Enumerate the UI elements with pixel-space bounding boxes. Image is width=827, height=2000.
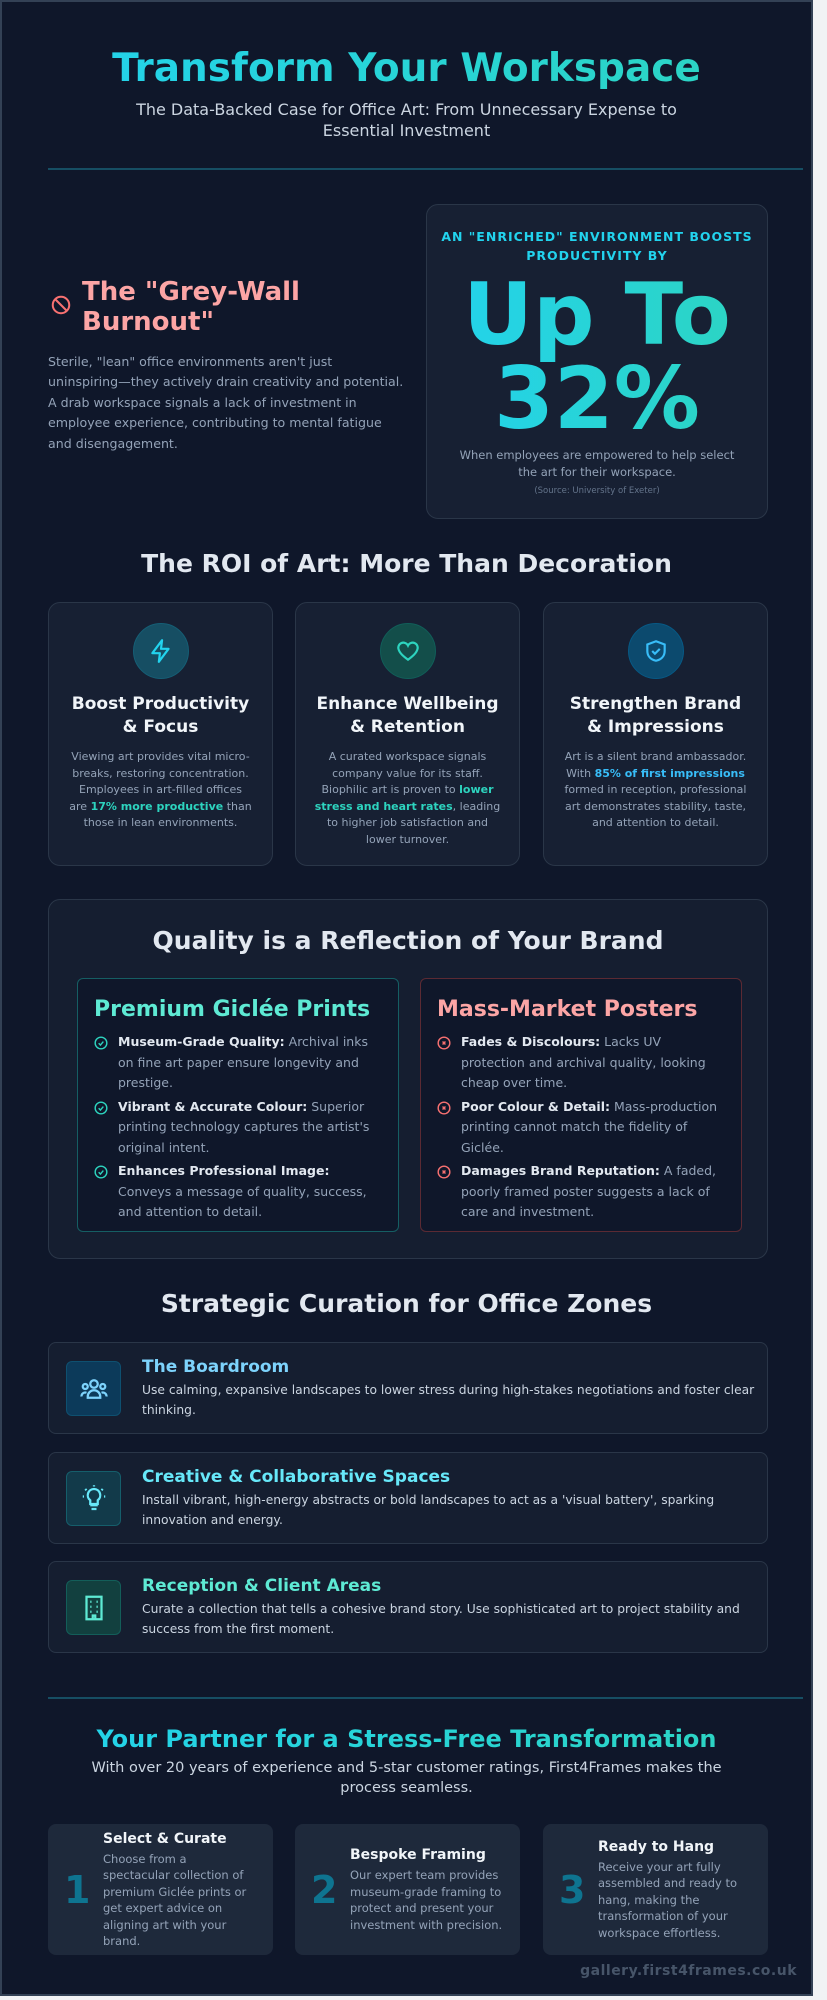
text: employee experience, contributing to mental fatigue <box>48 415 382 430</box>
subtitle: The Data-Backed Case for Office Art: From Unnecessary Expense to Essential Investment <box>136 100 677 140</box>
heading: The "Grey-Wall <box>82 277 300 307</box>
icon: heart <box>380 623 436 679</box>
card: productivity: Viewing art provides vital micro-breaks, restoring concentration. Employees in art-filled offices are 17% more productive than those in lean environments. <box>69 750 252 829</box>
card: brand: Strengthen Brand <box>570 694 741 714</box>
step 3: 3 <box>559 1868 585 1912</box>
card: wellbeing: A curated workspace signals company value for its staff. Biophilic art is proven to lower stress and heart rates, leading to higher job satisfaction and lower turnover. <box>315 750 500 846</box>
heading <box>82 277 300 337</box>
text: uninspiring—they actively drain creativity and potential. <box>48 374 403 389</box>
sub-panel: giclee: Museum-Grade Quality: Archival inks on fine art paper ensure longevity and prestige. <box>118 1034 368 1090</box>
zone: reception <box>48 1561 768 1653</box>
sub-panel: giclee <box>77 978 399 1232</box>
big stat: 32% <box>494 349 700 449</box>
source: (Source: University of Exeter) <box>534 486 660 496</box>
zone: creative: Install vibrant, high-energy abstracts or bold landscapes to act as a 'visual battery', sparking innovation and energy. <box>142 1493 714 1526</box>
panel: quality <box>48 899 768 1259</box>
sub-panel: giclee: Premium Giclée Prints <box>94 997 370 1022</box>
section: grey-wall burnout <box>48 277 403 451</box>
sub-panel: posters: Poor Colour & Detail: Mass-production printing cannot match the fidelity of Giclée. <box>461 1098 717 1154</box>
heading: ROI: The ROI of Art: More Than Decoration <box>141 549 672 578</box>
card: brand <box>543 602 768 866</box>
step 2 <box>295 1824 520 1955</box>
partner subtitle: With over 20 years of experience and 5-star customer ratings, First4Frames makes the process seamless. <box>91 1760 722 1796</box>
step 2: Bespoke Framing <box>350 1847 486 1863</box>
step 2: Our expert team provides museum-grade framing to protect and present your investment with precision. <box>350 1868 502 1932</box>
step 2: 2 <box>311 1868 337 1912</box>
card: brand: & Impressions <box>587 717 724 737</box>
step 1: Select & Curate <box>103 1830 227 1846</box>
heading: partner: Your Partner for a Stress-Free Transformation <box>96 1725 716 1753</box>
step 1: 1 <box>64 1868 90 1912</box>
icon: shield <box>628 623 684 679</box>
step 3: Receive your art fully assembled and ready to hang, making the transformation of your workspace effortless. <box>598 1860 737 1940</box>
text: and disengagement. <box>48 436 178 451</box>
card: productivity: Boost Productivity <box>72 694 249 714</box>
card: brand: Art is a silent brand ambassador. With 85% of first impressions formed in reception, professional art demonstrates stability, taste, and attention to detail. <box>564 750 746 829</box>
card: productivity <box>48 602 273 866</box>
heading: Quality is a Reflection of Your Brand <box>153 926 663 955</box>
sub-panel: posters: Mass-Market Posters <box>437 997 698 1022</box>
icon: bulb <box>66 1471 121 1526</box>
card: wellbeing <box>295 602 520 866</box>
stat label: AN "ENRICHED" ENVIRONMENT BOOSTS PRODUCTIVITY BY <box>441 229 753 263</box>
card: productivity: & Focus <box>123 717 198 737</box>
icon: people <box>66 1361 121 1416</box>
sub-panel: posters: Fades & Discolours: Lacks UV protection and archival quality, looking cheap over time. <box>461 1034 706 1090</box>
step 1 <box>48 1824 273 1955</box>
zone: reception: Reception & Client Areas <box>142 1576 381 1596</box>
big stat: Up To <box>463 265 731 365</box>
card: wellbeing: Enhance Wellbeing <box>316 694 499 714</box>
title <box>2 44 811 94</box>
heading: Burnout" <box>82 307 214 337</box>
zone: boardroom: Use calming, expansive landscapes to lower stress during high-stakes negotiations and foster clear thinking. <box>142 1383 754 1416</box>
step 3 <box>543 1824 768 1955</box>
heading: zones: Strategic Curation for Office Zones <box>161 1289 652 1318</box>
sub-panel: posters <box>420 978 742 1232</box>
zone: creative <box>48 1452 768 1544</box>
zone: creative: Creative & Collaborative Spaces <box>142 1467 450 1487</box>
sub-panel: posters: Damages Brand Reputation: A faded, poorly framed poster suggests a lack of care and investment. <box>461 1163 716 1219</box>
icon: prohibited <box>52 296 70 314</box>
text: Sterile, "lean" office environments aren't just <box>48 354 332 369</box>
zone: reception: Curate a collection that tells a cohesive brand story. Use sophisticated art to project stability and success from the first moment. <box>142 1602 740 1636</box>
step 1: Choose from a spectacular collection of premium Giclée prints or get expert advice on aligning art with your brand. <box>103 1852 246 1948</box>
text <box>48 354 403 451</box>
title: Transform Your Workspace <box>112 46 701 91</box>
stat caption: When employees are empowered to help select the art for their workspace. <box>460 448 734 479</box>
icon: bolt <box>132 623 188 679</box>
text: A drab workspace signals a lack of investment in <box>48 395 357 410</box>
zone: boardroom: The Boardroom <box>142 1357 289 1377</box>
step 3: Ready to Hang <box>598 1839 714 1855</box>
footer url: gallery.first4frames.co.uk <box>580 1963 797 1979</box>
card: wellbeing: & Retention <box>350 717 465 737</box>
zone: boardroom <box>48 1342 768 1434</box>
sub-panel: giclee: Enhances Professional Image: Conveys a message of quality, success, and attention to detail. <box>118 1163 367 1219</box>
icon: building <box>66 1580 121 1635</box>
stat card <box>426 204 768 519</box>
big stat <box>427 273 767 441</box>
sub-panel: giclee: Vibrant & Accurate Colour: Superior printing technology captures the artist's original intent. <box>118 1098 369 1154</box>
